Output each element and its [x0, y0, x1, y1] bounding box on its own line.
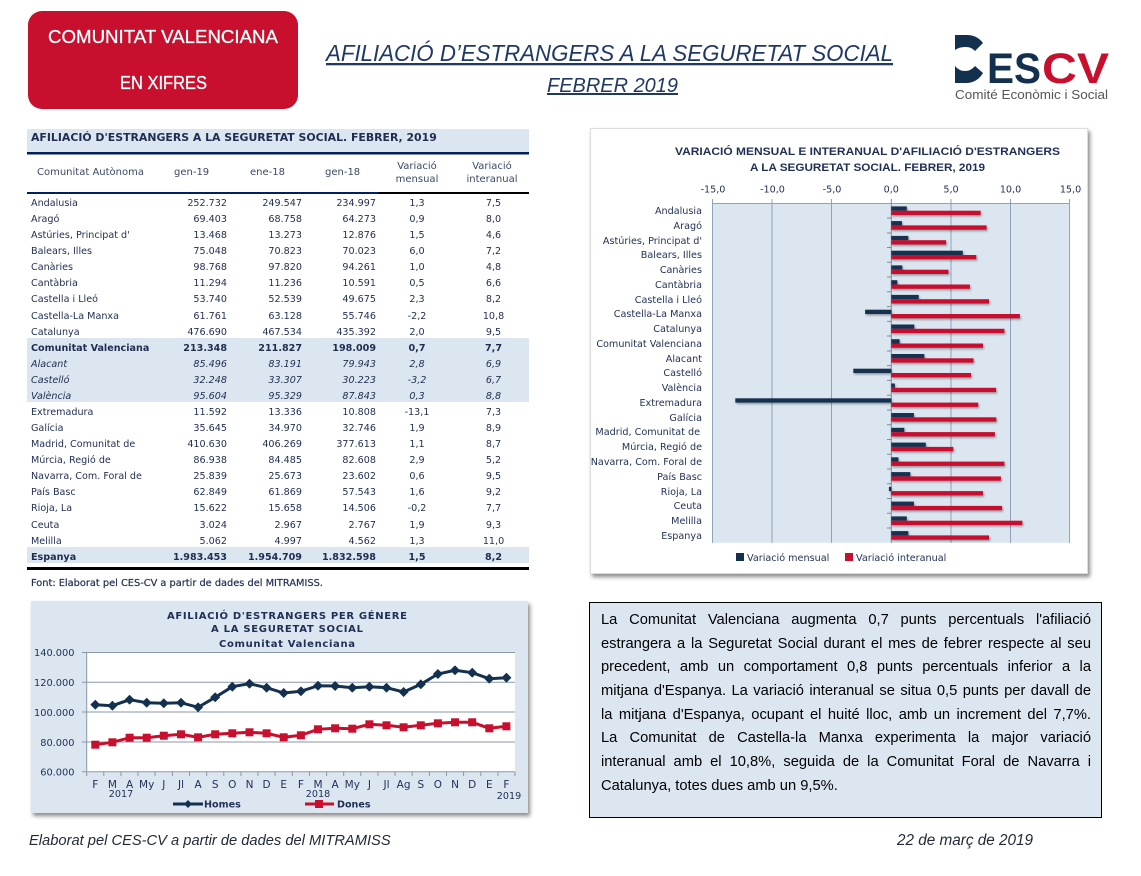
top axis labels: 15,0 [1060, 184, 1081, 196]
table rows: 61.869 [268, 487, 302, 498]
table rows: 8,2 [486, 294, 501, 305]
top axis labels: -15,0 [701, 184, 725, 196]
table rows: 32.746 [342, 423, 376, 434]
table rows: 11.592 [193, 407, 227, 418]
table rows: Cantàbria [31, 278, 78, 289]
table rows: 13.468 [193, 230, 227, 241]
table rows: 1,9 [409, 520, 425, 531]
table rows: 95.329 [268, 391, 302, 402]
table rows: 8,0 [486, 214, 501, 225]
table rows: 1,3 [409, 536, 425, 547]
y axis labels: 140.000 [34, 648, 74, 659]
table rows: Galícia [31, 423, 63, 434]
category labels: Madrid, Comunitat de [595, 427, 700, 438]
logo: CESCV: CV [1042, 45, 1109, 93]
table rows: 6,0 [409, 246, 425, 257]
x axis labels: My [345, 779, 360, 791]
x axis labels: 2019 [497, 791, 521, 802]
table rows: 9,5 [486, 327, 501, 338]
table rows: 11,0 [483, 536, 504, 547]
table rows: 7,5 [486, 198, 501, 209]
x axis labels: 2017 [109, 789, 133, 800]
table rows: 0,5 [409, 278, 425, 289]
table rows: 7,7 [486, 503, 501, 514]
category labels: Navarra, Com. Foral de [591, 457, 702, 468]
table rows: 1.983.453 [173, 552, 227, 563]
top axis labels: 0,0 [884, 184, 899, 196]
chart title [675, 145, 1060, 174]
table rows: 13.336 [268, 407, 302, 418]
table rows: 0,9 [409, 214, 425, 225]
top axis labels [701, 184, 1081, 196]
table rows: 4.562 [349, 536, 376, 547]
x axis labels: D [263, 779, 271, 791]
table rows: 0,3 [409, 391, 425, 402]
table rows: 406.269 [262, 439, 302, 450]
title badge: Comunitat Valenciana en xifres [28, 11, 298, 109]
category labels: Extremadura [639, 398, 702, 409]
commentary text box: La Comunitat de Castella-la Manxa experimenta la major variació [601, 730, 1091, 746]
table rows: 467.534 [262, 327, 302, 338]
table rows: 5,2 [486, 455, 501, 466]
top axis labels: 10,0 [1000, 184, 1021, 196]
logo: CESCV: ES [987, 45, 1041, 93]
table rows: 7,3 [486, 407, 501, 418]
table header: Variació [397, 161, 437, 172]
table rows: 6,7 [486, 375, 501, 386]
table header [27, 152, 529, 194]
table rows: 68.758 [268, 214, 302, 225]
table rows: 57.543 [342, 487, 376, 498]
commentary text box: Catalunya, totes dues amb un 9,5%. [601, 778, 838, 794]
main heading: AFILIACIÓ D’ESTRANGERS A LA SEGURETAT SOCIAL [324, 40, 893, 66]
chart title: A LA SEGURETAT SOCIAL. FEBRER, 2019 [750, 162, 985, 174]
table rows: 10.808 [342, 407, 376, 418]
table rows: 1,3 [409, 198, 425, 209]
table rows: Rioja, La [31, 503, 72, 514]
table rows: 69.403 [193, 214, 227, 225]
category labels: Espanya [661, 531, 702, 542]
table rows: 82.608 [342, 455, 376, 466]
x axis labels: 2018 [306, 789, 330, 800]
logo: CESCV [955, 35, 1109, 102]
title badge: Comunitat Valenciana en xifres: EN XIFRES [120, 72, 207, 93]
table rows: 213.348 [183, 343, 227, 354]
table rows: 23.602 [342, 471, 376, 482]
table rows: 8,7 [486, 439, 501, 450]
chart title: VARIACIÓ MENSUAL E INTERANUAL D'AFILIACIÓ D'ESTRANGERS [675, 145, 1060, 158]
top axis labels: -10,0 [760, 184, 785, 196]
y axis labels: 60.000 [40, 768, 74, 778]
table rows: Balears, Illes [31, 246, 92, 257]
table rows: 211.827 [258, 343, 302, 354]
x axis labels: N [246, 779, 253, 791]
commentary text box: mitjana d'Espanya. La variació interanual se situa 0,5 punts per davall de [601, 683, 1091, 699]
table rows: 79.943 [342, 359, 376, 370]
category labels: Alacant [666, 354, 702, 365]
table rows: 410.630 [187, 439, 227, 450]
x axis labels: F [92, 779, 98, 791]
table rows: 5.062 [200, 536, 227, 547]
table rows: 34.970 [268, 423, 302, 434]
table rows: 1,9 [409, 423, 425, 434]
legend [173, 800, 371, 810]
main heading: FEBRER 2019 [547, 75, 678, 97]
table rows: 30.223 [342, 375, 376, 386]
category labels: València [662, 382, 702, 394]
line: Homes [95, 670, 506, 707]
table rows: -2,2 [408, 311, 426, 322]
table rows: 6,9 [486, 359, 501, 370]
legend: Variació interanual [856, 552, 946, 564]
table rows: 7,7 [485, 343, 502, 354]
table rows: Castella-La Manxa [31, 311, 119, 322]
chart title: Comunitat Valenciana [219, 639, 355, 650]
category labels: Ceuta [674, 501, 702, 512]
category labels: Castelló [663, 367, 702, 379]
table rows: -13,1 [405, 407, 429, 418]
table header: interanual [466, 174, 518, 185]
x axis labels: A [195, 779, 203, 791]
plot area [712, 203, 1070, 543]
bars: variació interanual [891, 211, 1022, 540]
table rows: 62.849 [193, 487, 227, 498]
table rows: 70.823 [268, 246, 302, 257]
table rows: 3.024 [200, 520, 227, 531]
table rows: 14.506 [342, 503, 376, 514]
table rows: 1,5 [409, 230, 425, 241]
table rows: Castelló [31, 375, 69, 386]
table rows: Extremadura [31, 407, 93, 418]
x axis labels: D [468, 779, 476, 791]
source note: Font: Elaborat pel CES-CV a partir de dades del MITRAMISS. [31, 578, 323, 589]
table rows: 234.997 [336, 198, 376, 209]
x axis labels: Jl [382, 779, 390, 791]
table rows: 70.023 [342, 246, 376, 257]
table rows: Ceuta [31, 520, 59, 531]
commentary text box: La Comunitat Valenciana augmenta 0,7 punts percentuals l'afiliació [601, 612, 1091, 628]
table rows: 84.485 [268, 455, 302, 466]
table rows: 97.820 [268, 262, 302, 273]
table rows: 4,6 [486, 230, 501, 241]
table rows: 85.496 [193, 359, 227, 370]
x axis labels: J [367, 779, 371, 791]
table rows: 9,5 [486, 471, 501, 482]
category labels: Cantàbria [655, 279, 702, 291]
table bottom rule [27, 567, 529, 570]
table title [27, 129, 529, 152]
table rows: 2,3 [409, 294, 425, 305]
table rows: Castella i Lleó [31, 294, 98, 305]
table rows: 2,8 [409, 359, 425, 370]
table rows: Espanya [31, 552, 76, 563]
table rows: Andalusia [31, 198, 78, 209]
table rows: 94.261 [342, 262, 376, 273]
legend [736, 552, 946, 564]
x axis labels: O [228, 779, 236, 791]
table header: ene-18 [250, 167, 285, 178]
plot area [87, 652, 515, 772]
x axis labels: N [451, 779, 459, 791]
category labels: Múrcia, Regió de [622, 441, 702, 453]
table rows: 2,9 [409, 455, 425, 466]
table rows: Canàries [31, 262, 73, 273]
table rows: 53.740 [193, 294, 227, 305]
table rows: 15.658 [268, 503, 302, 514]
x axis labels: F [298, 779, 304, 791]
top axis labels: -5,0 [823, 184, 841, 196]
table rows: 2.767 [349, 520, 376, 531]
table rows: 377.613 [336, 439, 376, 450]
category labels: Canàries [660, 264, 702, 276]
x axis labels: E [280, 779, 287, 791]
table rows: 55.746 [342, 311, 376, 322]
table rows: Comunitat Valenciana [31, 343, 149, 354]
footer: source: Elaborat pel CES-CV a partir de dades del MITRAMISS [29, 833, 391, 849]
commentary text box: estrangera a la Seguretat Social durant el mes de febrer respecte al seu [601, 636, 1091, 652]
table rows: 1.954.709 [248, 552, 302, 563]
commentary text box [589, 602, 1102, 818]
legend: Dones [337, 800, 371, 810]
table rows: 10,8 [483, 311, 504, 322]
table rows: 198.009 [332, 343, 376, 354]
panel: bar chart of monthly and year-on-year variation [590, 128, 1088, 574]
table rows: 64.273 [342, 214, 376, 225]
table rows: 252.732 [187, 198, 227, 209]
x axis labels: S [417, 779, 424, 791]
table rows: 476.690 [187, 327, 227, 338]
x axis labels: S [212, 779, 219, 791]
table rows: 1.832.598 [322, 552, 376, 563]
table rows: 33.307 [268, 375, 302, 386]
table rows: 10.591 [342, 278, 376, 289]
x axis labels: E [486, 779, 493, 791]
table rows: 1,0 [409, 262, 425, 273]
category labels: Comunitat Valenciana [596, 339, 702, 350]
title badge: Comunitat Valenciana en xifres: COMUNITAT VALENCIANA [48, 26, 279, 47]
table rows: 0,7 [408, 343, 426, 354]
table rows: València [31, 391, 71, 402]
x axis labels: Jl [177, 779, 184, 791]
table rows: 435.392 [336, 327, 376, 338]
table rows: 11.294 [193, 278, 227, 289]
line: Dones [95, 722, 506, 745]
table rows: 86.938 [193, 455, 227, 466]
table rows: 9,2 [486, 487, 501, 498]
table rows: Madrid, Comunitat de [31, 439, 135, 450]
table rows: Navarra, Com. Foral de [31, 471, 142, 482]
table rows: Múrcia, Regió de [31, 455, 111, 466]
table header: Variació [472, 161, 512, 172]
table rows: 9,3 [486, 520, 501, 531]
table rows: -3,2 [408, 375, 426, 386]
category labels: País Basc [657, 471, 702, 483]
table rows: 249.547 [262, 198, 302, 209]
category labels: Galícia [669, 412, 702, 424]
top axis labels: 5,0 [943, 184, 959, 196]
table rows: 83.191 [268, 359, 302, 370]
table rows: 1,1 [409, 439, 425, 450]
y axis labels: 80.000 [40, 738, 74, 749]
commentary text box: interanual amb el 10,8%, seguida de la Comunitat Foral de Navarra i [601, 754, 1091, 770]
table rows: 95.604 [193, 391, 227, 402]
table rows: 52.539 [268, 294, 302, 305]
x axis labels: A [332, 779, 340, 791]
table rows: 0,6 [409, 471, 425, 482]
table header: Comunitat Autònoma [37, 167, 144, 178]
table rows: 87.843 [342, 391, 376, 402]
legend: Homes [204, 800, 241, 810]
table rows: 13.273 [268, 230, 302, 241]
category labels: Balears, Illes [641, 250, 702, 261]
table header: gen-19 [174, 167, 209, 178]
table rows: Alacant [31, 359, 67, 370]
x axis labels: My [139, 779, 154, 791]
category labels: Castella i Lleó [635, 294, 702, 306]
table rows [27, 198, 529, 563]
table rows: 49.675 [342, 294, 376, 305]
table rows: 25.673 [268, 471, 302, 482]
table rows: 1,6 [409, 487, 425, 498]
table title: AFILIACIÓ D'ESTRANGERS A LA SEGURETAT SOCIAL. FEBRER, 2019 [31, 131, 437, 144]
x axis labels: A [126, 779, 134, 791]
table rows: 61.761 [193, 311, 227, 322]
table rows: 11.236 [268, 278, 302, 289]
commentary text box: la mitjana d'Espanya, ocupant el huité lloc, amb un increment del 7,7%. [601, 707, 1091, 723]
category labels [591, 206, 702, 542]
x axis labels: F [503, 779, 509, 791]
category labels: Astúries, Principat d' [603, 235, 702, 247]
table rows: 4.997 [275, 536, 302, 547]
table rows: 75.048 [193, 246, 227, 257]
table rows: Astúries, Principat d' [31, 230, 130, 241]
category labels: Catalunya [653, 324, 702, 335]
panel: line chart by gender [31, 601, 528, 813]
table rows: 1,5 [408, 552, 426, 563]
table rows: -0,2 [408, 503, 426, 514]
table rows: 2.967 [275, 520, 302, 531]
footer: date: 22 de març de 2019 [897, 832, 1033, 849]
table rows: 4,8 [486, 262, 501, 273]
table rows: 32.248 [193, 375, 227, 386]
table rows: 25.839 [193, 471, 227, 482]
table rows: Catalunya [31, 327, 80, 338]
table rows: 98.768 [193, 262, 227, 273]
legend: Variació mensual [747, 552, 829, 564]
bars: variació mensual [735, 206, 963, 535]
table rows: Aragó [31, 214, 59, 225]
table rows: 8,9 [486, 423, 501, 434]
table rows: 7,2 [486, 246, 501, 257]
y axis labels [34, 648, 74, 778]
y axis labels: 120.000 [34, 678, 74, 689]
category labels: Rioja, La [661, 487, 702, 498]
table rows: 8,8 [486, 391, 501, 402]
x axis labels: J [161, 779, 165, 791]
chart title: A LA SEGURETAT SOCIAL [211, 624, 364, 635]
table rows: 63.128 [268, 311, 302, 322]
x axis labels: Ag [397, 779, 411, 791]
category labels: Aragó [674, 220, 702, 232]
chart title [167, 609, 407, 650]
x axis labels: M [108, 779, 117, 791]
commentary text box: precedent, amb un comportament 0,8 punts percentuals inferior a la [601, 659, 1091, 675]
table rows: 12.876 [342, 230, 376, 241]
table rows: 8,2 [485, 552, 502, 563]
table rows: 35.645 [193, 423, 227, 434]
panel: data table [27, 129, 529, 589]
x axis labels [92, 779, 521, 802]
category labels: Andalusia [655, 206, 702, 217]
table rows: 6,6 [486, 278, 501, 289]
table rows: Melilla [31, 536, 62, 547]
y axis labels: 100.000 [34, 708, 74, 719]
table rows: 15.622 [193, 503, 227, 514]
table header: gen-18 [325, 167, 360, 178]
main heading [324, 40, 893, 97]
table rows: País Basc [31, 487, 76, 498]
table header: mensual [396, 174, 438, 185]
logo: CESCV: Comité Econòmic i Social [955, 87, 1108, 102]
x axis labels: M [313, 779, 323, 791]
category labels: Castella-La Manxa [614, 309, 702, 320]
table rows: 2,0 [409, 327, 425, 338]
category labels: Melilla [671, 516, 702, 527]
x axis labels: O [434, 779, 442, 791]
chart title: AFILIACIÓ D'ESTRANGERS PER GÉNERE [167, 609, 407, 622]
